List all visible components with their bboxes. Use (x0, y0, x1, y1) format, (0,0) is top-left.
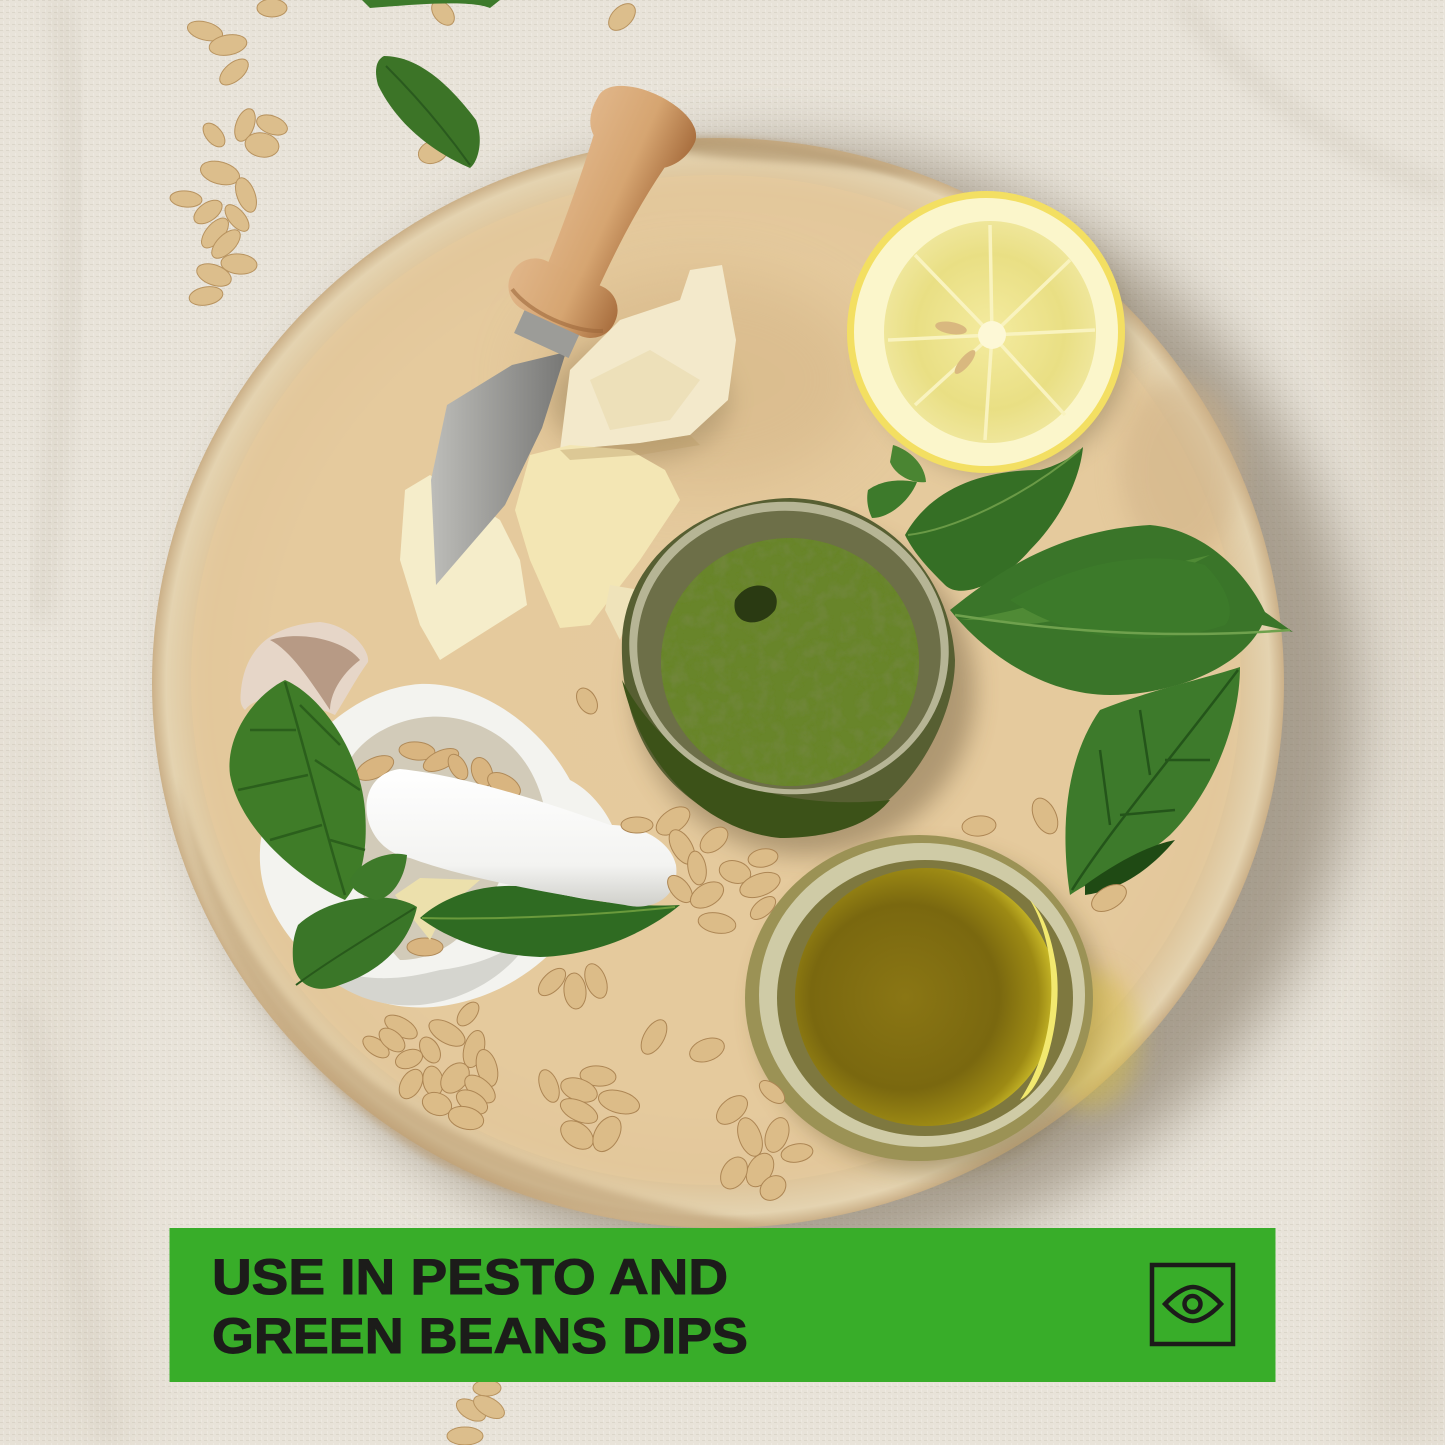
pine nuts scattered on cloth (169, 0, 640, 1445)
knife (431, 71, 708, 585)
leaf: lower right (1065, 667, 1240, 895)
banner heading: GREEN BEANS DIPS (212, 1308, 748, 1364)
banner heading: USE IN PESTO AND (212, 1249, 728, 1305)
basil leaf: long under pestle (420, 886, 680, 957)
olive oil jar (745, 835, 1140, 1170)
basil sprig: small on mortar (350, 854, 407, 900)
plate (152, 137, 1284, 1228)
pesto surface (661, 538, 919, 786)
knife handle (490, 71, 708, 369)
pine nuts in mortar (353, 740, 525, 956)
olive oil surface (795, 868, 1057, 1126)
lemon slice (847, 191, 1128, 474)
garlic clove (240, 622, 368, 715)
basil leaf: large on mortar (229, 680, 366, 900)
cheese: parmesan chunks (400, 265, 736, 660)
cheese bit in mortar (395, 878, 480, 940)
green banner (170, 1228, 1276, 1382)
basil leaf: small lower (293, 897, 417, 989)
knife blade (431, 352, 566, 585)
basil leaf: top edge (362, 0, 500, 8)
pine nuts on plate (359, 684, 1131, 1205)
basil leaf: top centre (376, 56, 480, 168)
pestle (366, 769, 676, 907)
leaf: upper right (905, 447, 1083, 591)
pesto jar (610, 481, 975, 855)
basil leaves: right cluster (867, 445, 1293, 895)
leaf: large right (950, 525, 1293, 695)
icon: eye in square (1152, 1265, 1233, 1344)
leaf: small sprig (867, 480, 917, 518)
leaf: dark bit (1085, 840, 1175, 895)
plate shadow (190, 145, 1360, 1265)
mortar bowl (260, 684, 612, 1007)
